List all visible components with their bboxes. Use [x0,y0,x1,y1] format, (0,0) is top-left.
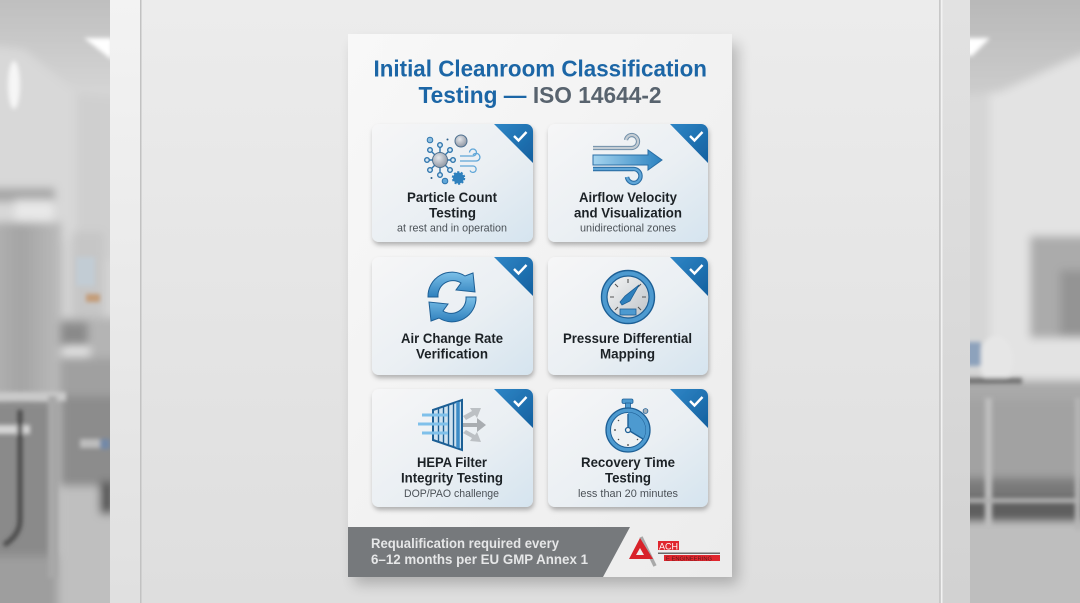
title [374,56,707,108]
label: Testing [429,204,476,220]
label [574,189,682,234]
corner check [670,124,708,163]
label: Airflow Velocity [579,189,677,205]
corner check [494,124,533,163]
background: wall panels [110,0,970,603]
footer band: 6–12 months per EU GMP Annex 1 [371,552,588,567]
label: Testing [605,470,651,486]
corner check [494,389,533,428]
title: Initial Cleanroom Classification [374,56,707,82]
logo: ACH engineering: E ENGINEERING [666,556,712,562]
label: Pressure Differential [563,330,692,346]
card: particle count testing [372,124,533,242]
poster [348,34,732,577]
icon: stopwatch [606,399,650,452]
label: unidirectional zones [580,222,676,234]
card: hepa filter [372,389,533,507]
logo: ACH engineering: ACH [659,542,678,552]
title: Testing — ISO 14644-2 [418,82,662,108]
corner check [670,389,708,428]
footer band [348,527,630,577]
label: less than 20 minutes [578,488,678,500]
card: pressure differential [548,257,708,375]
footer band: Requalification required every [371,536,559,551]
poster shadow [354,44,738,584]
background: blurred cleanroom right [970,0,1080,603]
label: Mapping [600,346,655,362]
icon: particles [425,135,480,184]
card: air change rate [372,257,533,375]
background: blurred cleanroom left [0,0,110,603]
label: Particle Count [407,189,497,205]
icon: circular arrows [428,272,476,322]
label: at rest and in operation [397,222,507,234]
corner check [494,257,533,296]
label: Recovery Time [581,454,675,470]
icon: hepa filter [418,400,486,450]
label [397,189,507,234]
logo: ACH engineering [629,537,720,566]
corner check [670,257,708,296]
card: airflow velocity [548,124,708,242]
label: Verification [416,346,488,362]
label [578,454,678,500]
label [401,330,503,362]
label: Integrity Testing [401,470,503,486]
label: HEPA Filter [417,454,487,470]
label [563,330,692,362]
label: Air Change Rate [401,330,503,346]
icon: pressure gauge [602,270,654,324]
label [401,454,503,500]
label: DOP/PAO challenge [404,488,499,500]
label: and Visualization [574,204,682,220]
icon: airflow arrows [593,135,662,183]
card: recovery time [548,389,708,507]
